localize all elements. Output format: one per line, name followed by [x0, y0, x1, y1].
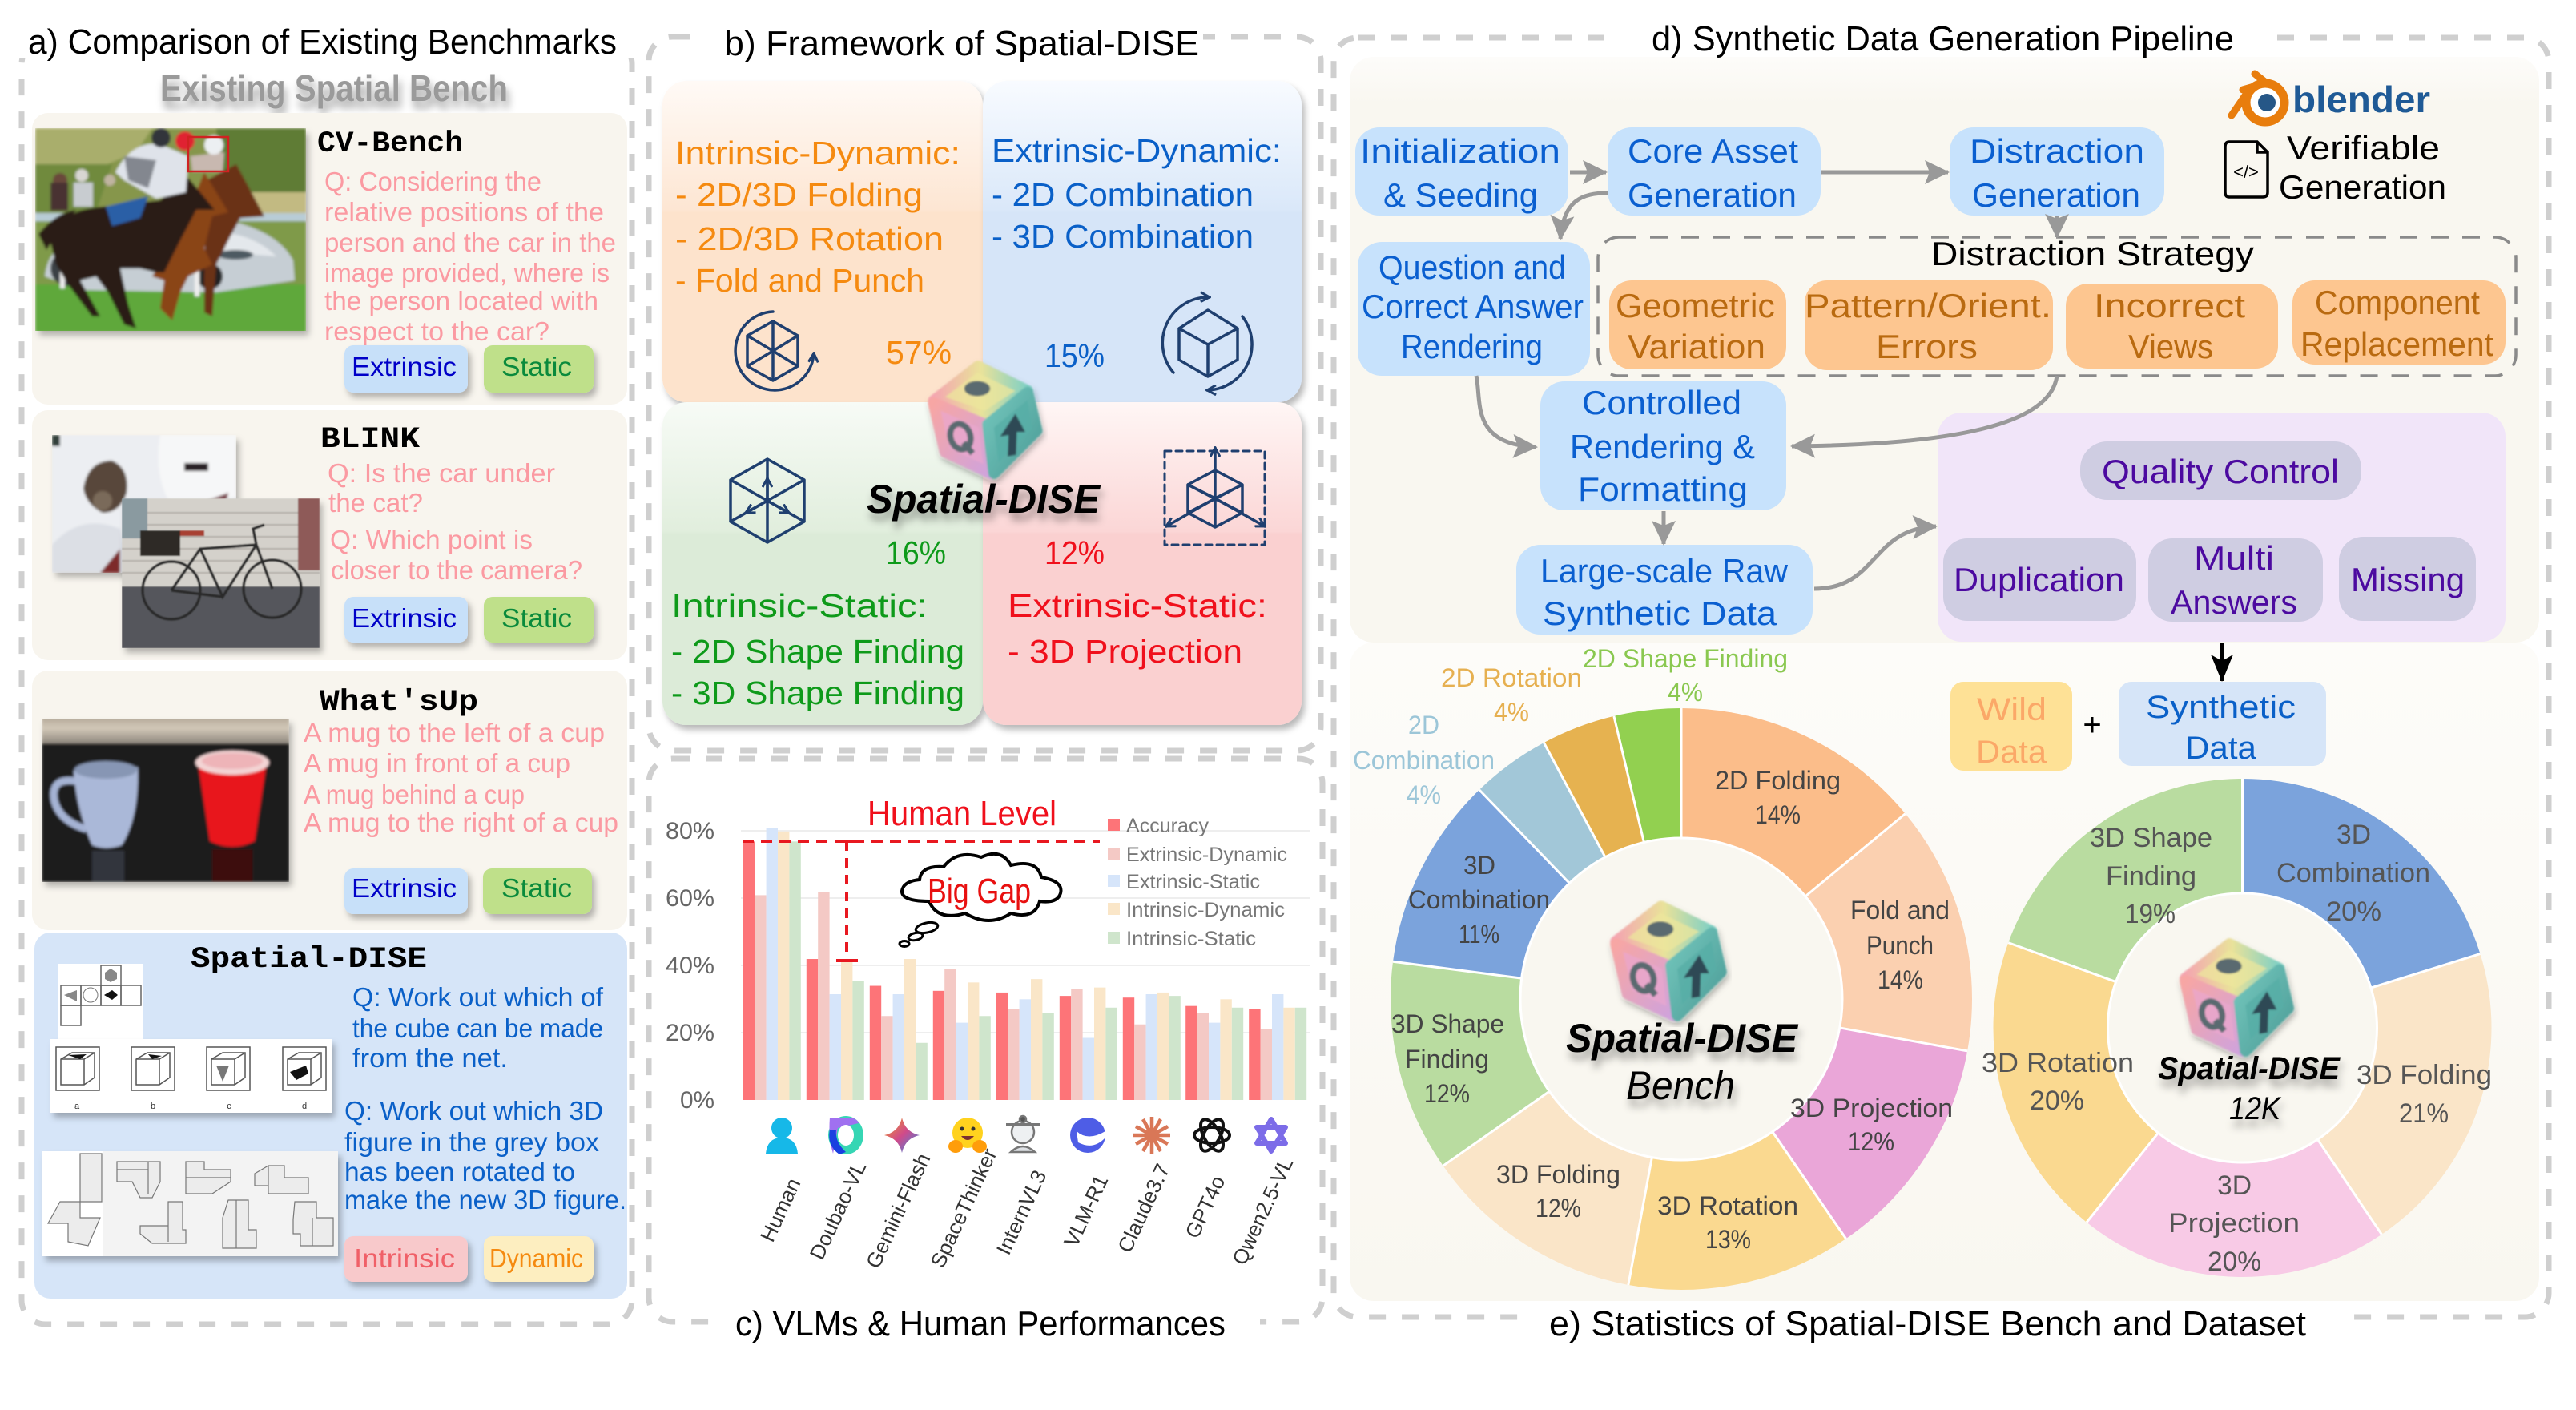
node: question and answer rendering: Question and: [1379, 248, 1566, 286]
slice labels: Combination: [2276, 858, 2430, 888]
slice labels: 19%: [2125, 899, 2176, 929]
node: initialization and seeding: [1355, 127, 1568, 216]
center label: Spatial-DISE: [2158, 1051, 2341, 1086]
model labels: Claude3.7: [1113, 1160, 1174, 1256]
badge: intrinsic: [344, 1236, 468, 1282]
question text: respect to the car?: [324, 316, 549, 346]
node: large-scale raw synthetic data: Synthetic Data: [1543, 594, 1777, 632]
donut chart: Spatial-DISE Bench: [1353, 644, 1967, 1285]
node: controlled rendering and formatting: [1540, 381, 1786, 510]
strategy: incorrect views: [2066, 284, 2278, 369]
slice labels: 3D: [2217, 1170, 2252, 1201]
photo: bicycle: [122, 498, 320, 648]
node: initialization and seeding: Initialization: [1360, 132, 1560, 170]
badge: extrinsic: Extrinsic: [352, 603, 457, 633]
slice labels: 2D Rotation: [1441, 663, 1582, 692]
panel b: framework of Spatial-DISE: [649, 24, 1321, 751]
panel b title: b) Framework of Spatial-DISE: [724, 24, 1199, 63]
icon: VLM-R1: [1070, 1118, 1105, 1153]
quadrant: intrinsic-static: - 2D Shape Finding: [671, 633, 964, 670]
question text: from the net.: [352, 1043, 508, 1073]
icon: InternVL: [1006, 1116, 1040, 1152]
question text: Q: Is the car under: [328, 458, 555, 488]
quadrant: intrinsic-dynamic: 57%: [886, 334, 952, 371]
question text: [344, 982, 626, 1215]
quadrant: extrinsic-dynamic: Extrinsic-Dynamic:: [992, 132, 1282, 169]
photo: mug and cup: [42, 713, 289, 882]
pill: multi answers: Multi: [2194, 539, 2274, 577]
box: wild data: Data: [1976, 735, 2047, 770]
quadrant: extrinsic-static: Extrinsic-Static:: [1008, 587, 1267, 624]
node: distraction generation: Generation: [1972, 176, 2140, 214]
logo: dice: [1616, 907, 1721, 1015]
slice labels: 2D Folding: [1715, 766, 1841, 795]
donut chart: Spatial-DISE 12K: [1982, 779, 2492, 1277]
question text: Q: Which point is: [330, 525, 533, 554]
logo: dice: [934, 366, 1036, 473]
pill: multi answers: [2148, 538, 2323, 622]
slice labels: 3D Shape: [1391, 1009, 1504, 1038]
label: verifiable generation: [2279, 129, 2446, 206]
card: BLINK: [32, 410, 627, 660]
model labels: Doubao-VL: [805, 1158, 871, 1263]
center label: [2158, 1051, 2341, 1126]
bar chart: 20%: [666, 1020, 714, 1046]
figure: cube net puzzle: c: [227, 1102, 231, 1111]
benchmark name: Spatial-DISE: [191, 943, 427, 977]
slice labels: [1353, 644, 1953, 1254]
badge: extrinsic: Extrinsic: [352, 352, 457, 381]
legend: [1108, 815, 1287, 950]
slice labels: 2D Shape Finding: [1583, 644, 1788, 673]
slice labels: 3D: [2337, 820, 2371, 850]
plus sign: +: [2083, 707, 2102, 743]
benchmark name: CV-Bench: [317, 127, 463, 161]
question text: has been rotated to: [344, 1157, 575, 1186]
quadrant: intrinsic-dynamic: - 2D/3D Rotation: [675, 220, 944, 257]
group: distraction strategy: Distraction Strategy: [1931, 235, 2254, 272]
model labels: GPT4o: [1180, 1172, 1230, 1242]
pill: duplication: Duplication: [1954, 561, 2124, 598]
node: core asset generation: [1608, 127, 1821, 216]
quadrant: intrinsic-dynamic: Intrinsic-Dynamic:: [675, 135, 960, 171]
caption list: A mug to the right of a cup: [304, 808, 618, 837]
node: distraction generation: Distraction: [1970, 132, 2144, 170]
badge: extrinsic: [344, 345, 468, 393]
label: verifiable generation: Generation: [2279, 168, 2446, 206]
slice labels: [1982, 820, 2492, 1277]
question text: the cube can be made: [352, 1013, 603, 1043]
badge: extrinsic: [344, 868, 468, 914]
slice labels: 2D: [1408, 711, 1439, 739]
node: initialization and seeding: & Seeding: [1383, 176, 1538, 214]
model labels: Qwen2.5-VL: [1227, 1154, 1298, 1269]
strategy: incorrect views: Views: [2128, 328, 2213, 365]
annotation: human level: Human Level: [867, 794, 1057, 833]
arrows: pipeline flow: [1476, 172, 2057, 589]
slice labels: 4%: [1668, 678, 1703, 707]
quadrant: intrinsic-dynamic: - 2D/3D Folding: [675, 176, 923, 213]
question text: figure in the grey box: [344, 1127, 600, 1157]
human level line and gap marker: [743, 841, 1100, 961]
slice labels: Combination: [1408, 885, 1550, 914]
node: controlled rendering and formatting: Formatting: [1578, 470, 1748, 508]
quadrant: intrinsic-static: 16%: [886, 534, 946, 571]
group: distraction strategy: [1598, 235, 2516, 376]
model labels: Gemini-Flash: [861, 1150, 935, 1272]
slice labels: 3D Rotation: [1657, 1191, 1798, 1220]
slice labels: Finding: [1405, 1045, 1489, 1074]
node: question and answer rendering: [1358, 242, 1590, 376]
icon: Claude: [1133, 1117, 1170, 1154]
card: What'sUp: [32, 671, 627, 930]
quadrant: intrinsic-static: [662, 402, 983, 725]
node: core asset generation: Core Asset: [1628, 132, 1798, 170]
icon: projected cube: [1165, 448, 1265, 545]
box: synthetic data: Synthetic: [2146, 690, 2296, 725]
strategy: incorrect views: Incorrect: [2094, 287, 2245, 324]
strategy: geometric variation: Geometric: [1616, 287, 1775, 324]
figure: 3D rotation puzzle: [42, 1151, 338, 1256]
question text: Q: Work out which 3D: [344, 1096, 603, 1126]
panel a title: a) Comparison of Existing Benchmarks: [28, 22, 617, 62]
strategy: geometric variation: [1609, 280, 1786, 369]
strategy: component replacement: Component: [2315, 284, 2480, 321]
question text: the person located with: [324, 286, 598, 316]
question text: [324, 167, 616, 346]
center label: [1566, 1016, 1799, 1108]
panel c: VLMs and human performances: [649, 759, 1322, 1344]
badge: dynamic: [484, 1236, 594, 1282]
legend: Extrinsic-Dynamic: [1126, 844, 1287, 866]
icon: human: [766, 1118, 798, 1154]
benchmark name: BLINK: [320, 423, 421, 457]
photo: cat in snow: [52, 435, 236, 573]
icon: code file: </>: [2233, 162, 2259, 182]
legend: Extrinsic-Static: [1126, 871, 1260, 893]
pill: duplication: [1943, 538, 2136, 621]
panel a: comparison of existing benchmarks: [11, 22, 636, 1324]
strategy: pattern errors: Errors: [1876, 328, 1978, 365]
slice labels: 3D Shape: [2090, 823, 2212, 853]
icon: static cube with axes: [731, 459, 804, 542]
logo: dice: [2185, 944, 2288, 1051]
quadrant: intrinsic-static: Intrinsic-Static:: [671, 587, 928, 624]
model labels: InternVL3: [992, 1166, 1051, 1259]
question text: the cat?: [328, 488, 423, 518]
badge: static: Static: [501, 603, 572, 633]
caption list: [304, 718, 618, 837]
quadrant: extrinsic-dynamic: - 3D Combination: [992, 218, 1254, 255]
center label: 12K: [2229, 1091, 2282, 1126]
figure: cube net puzzle: a: [74, 1102, 80, 1111]
badge: static: [483, 868, 592, 914]
card: Spatial-DISE: [34, 933, 627, 1299]
question text: person and the car in the: [324, 228, 616, 257]
node: large-scale raw synthetic data: [1516, 545, 1813, 634]
question text: [328, 458, 582, 585]
pill: missing: [2339, 537, 2476, 621]
quadrant: extrinsic-dynamic: [983, 81, 1302, 402]
node: controlled rendering and formatting: Controlled: [1582, 384, 1741, 421]
question text: make the new 3D figure.: [344, 1185, 626, 1215]
quadrant: extrinsic-static: [983, 402, 1302, 725]
strategy: component replacement: [2292, 280, 2506, 365]
icon: Gemini star: [884, 1118, 920, 1153]
model labels: SpaceThinker: [925, 1145, 1002, 1271]
slice labels: 21%: [2399, 1098, 2449, 1129]
slice labels: 11%: [1459, 920, 1499, 949]
model labels: [755, 1145, 1298, 1272]
node: question and answer rendering: Correct Answer: [1362, 288, 1584, 325]
node: question and answer rendering: Rendering: [1401, 328, 1543, 365]
slice labels: 12%: [1848, 1127, 1894, 1156]
legend: Intrinsic-Static: [1126, 928, 1256, 950]
card: CV-Bench: [32, 113, 627, 405]
legend: Accuracy: [1126, 815, 1209, 837]
callout: big gap: [900, 854, 1061, 947]
panel c title: c) VLMs & Human Performances: [735, 1304, 1226, 1344]
bar chart: 0%: [680, 1087, 714, 1114]
slice labels: 14%: [1755, 800, 1801, 829]
icon: Qwen: [1257, 1119, 1286, 1151]
logo: blender: blender: [2292, 79, 2430, 120]
slice labels: Projection: [2168, 1208, 2300, 1239]
box: wild data: [1950, 682, 2072, 771]
strategy: component replacement: Replacement: [2300, 325, 2493, 363]
badge: dynamic: Dynamic: [489, 1243, 583, 1273]
node: large-scale raw synthetic data: Large-scale Raw: [1540, 552, 1789, 590]
bar chart: 40%: [666, 953, 714, 979]
question text: closer to the camera?: [331, 555, 582, 585]
figure: cube net puzzle: [50, 964, 332, 1113]
slice labels: 3D Folding: [2357, 1060, 2492, 1090]
slice labels: Combination: [1353, 746, 1495, 775]
badge: static: [484, 597, 594, 643]
node: core asset generation: Generation: [1628, 176, 1797, 214]
icon: GPT: [1194, 1116, 1230, 1154]
slice labels: 12%: [1536, 1194, 1581, 1223]
node: controlled rendering and formatting: Rendering &: [1570, 428, 1755, 465]
slice labels: 14%: [1878, 965, 1923, 994]
model labels: VLM-R1: [1059, 1171, 1113, 1251]
pill: multi answers: Answers: [2171, 583, 2297, 621]
box: synthetic data: Data: [2185, 731, 2257, 766]
badge: intrinsic: Intrinsic: [354, 1243, 455, 1273]
quadrant: extrinsic-static: 12%: [1044, 534, 1105, 571]
center label: Bench: [1626, 1063, 1735, 1108]
slice labels: 3D Rotation: [1982, 1048, 2134, 1078]
quadrant: extrinsic-dynamic: - 2D Combination: [992, 176, 1254, 213]
caption list: A mug to the left of a cup: [304, 718, 605, 747]
panel d title: d) Synthetic Data Generation Pipeline: [1652, 19, 2234, 58]
caption list: A mug behind a cup: [304, 780, 525, 809]
slice labels: Punch: [1866, 931, 1934, 960]
bar chart: 80%: [666, 818, 714, 844]
quadrant: intrinsic-dynamic: [662, 81, 983, 402]
icon: Hugging Face: [948, 1118, 987, 1153]
benchmark name: What'sUp: [320, 686, 478, 719]
badge: extrinsic: [344, 597, 468, 643]
slice labels: 4%: [1407, 780, 1441, 809]
slice labels: 12%: [1424, 1079, 1470, 1108]
photo: horse race: [35, 128, 306, 332]
panel e title: e) Statistics of Spatial-DISE Bench and Dataset: [1549, 1304, 2306, 1344]
slice labels: 20%: [2030, 1086, 2084, 1116]
node: distraction generation: [1950, 127, 2164, 216]
logo text: Spatial-DISE: Spatial-DISE: [867, 477, 1101, 522]
strategy: geometric variation: Variation: [1628, 328, 1765, 365]
quadrant: intrinsic-static: - 3D Shape Finding: [671, 675, 964, 711]
box: wild data: Wild: [1977, 692, 2047, 727]
bar chart: 60%: [666, 885, 714, 912]
question text: relative positions of the: [324, 197, 604, 227]
quadrant: intrinsic-dynamic: - Fold and Punch: [675, 262, 924, 299]
slice labels: 3D: [1463, 851, 1495, 880]
slice labels: 20%: [2208, 1247, 2261, 1277]
slice labels: Fold and: [1850, 896, 1950, 925]
question text: Q: Work out which of: [352, 982, 604, 1012]
panel d and e: pipeline and statistics: [1334, 19, 2549, 1344]
bar chart: [666, 818, 1310, 1114]
heading: existing spatial bench: Existing Spatial Bench: [160, 67, 508, 109]
panel: quality control: [1938, 413, 2506, 642]
strategy: pattern errors: Pattern/Orient.: [1805, 287, 2051, 324]
badge: static: Static: [501, 873, 572, 903]
icon: code file: [2225, 142, 2268, 197]
slice labels: 3D Projection: [1790, 1094, 1953, 1122]
figure: cube net puzzle: b: [151, 1102, 155, 1111]
icon: cube with rotation arrows: [1162, 297, 1252, 390]
badge: extrinsic: Extrinsic: [352, 873, 457, 903]
question text: image provided, where is: [324, 258, 610, 288]
question text: Q: Considering the: [324, 167, 541, 196]
badge: static: Static: [501, 352, 572, 381]
strategy: pattern errors: [1805, 280, 2053, 370]
callout: big gap: Big Gap: [928, 872, 1031, 911]
model labels: Human: [755, 1174, 805, 1246]
badge: static: [484, 345, 594, 393]
icon: Doubao: [828, 1116, 863, 1154]
slice labels: Finding: [2106, 861, 2196, 892]
caption list: A mug in front of a cup: [304, 748, 570, 778]
label: verifiable generation: Verifiable: [2287, 129, 2440, 167]
slice labels: 3D Folding: [1496, 1160, 1620, 1189]
pill: quality control: [2080, 441, 2361, 500]
quadrant: extrinsic-dynamic: 15%: [1044, 337, 1105, 374]
legend: Intrinsic-Dynamic: [1126, 899, 1285, 921]
quadrant: extrinsic-static: - 3D Projection: [1008, 633, 1242, 670]
figure: cube net puzzle: d: [302, 1102, 307, 1111]
arrow: to synthetic data: [2220, 643, 2224, 681]
pill: quality control: Quality Control: [2102, 453, 2339, 490]
pill: missing: Missing: [2351, 561, 2465, 598]
slice labels: 4%: [1494, 698, 1529, 727]
center label: Spatial-DISE: [1566, 1016, 1799, 1061]
slice labels: 20%: [2326, 896, 2381, 927]
slice labels: 13%: [1705, 1225, 1751, 1254]
icon: rotating cube with axes: [735, 312, 814, 390]
logo: blender: [2232, 74, 2430, 122]
box: synthetic data: [2119, 682, 2326, 766]
